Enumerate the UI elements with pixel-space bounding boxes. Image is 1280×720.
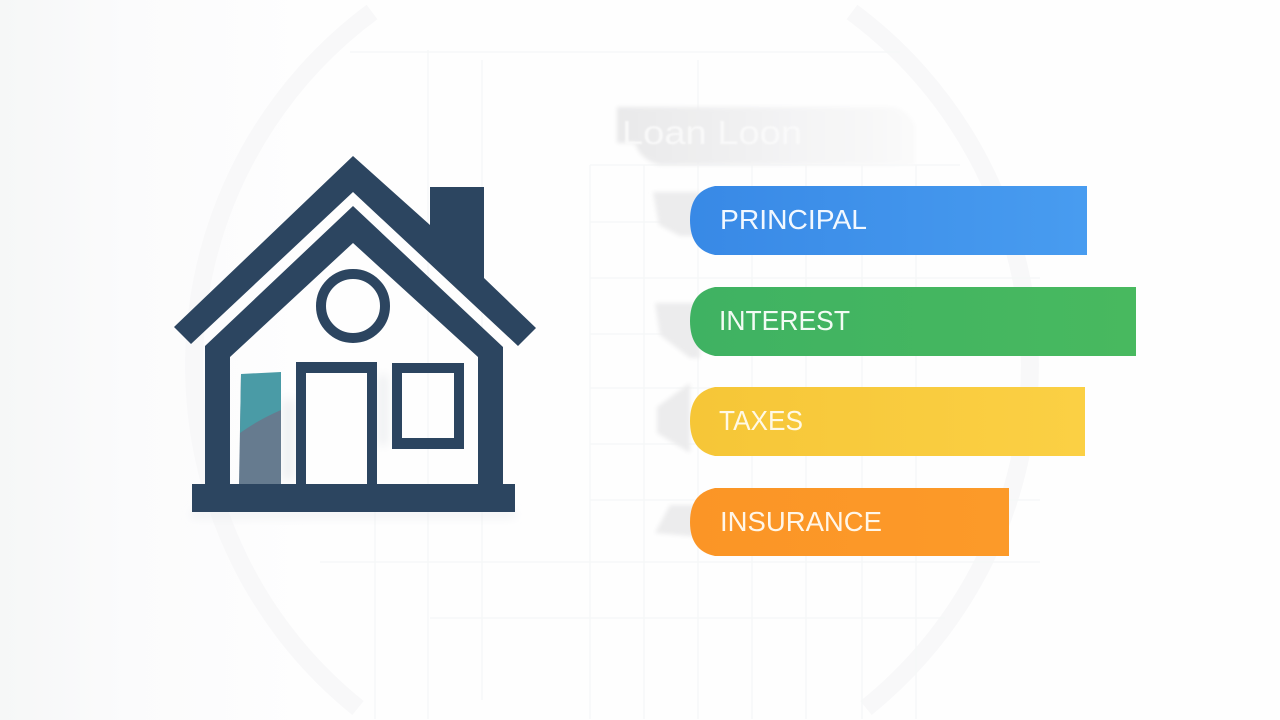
soft shadows [192, 375, 515, 516]
walls [205, 206, 503, 485]
bar: principal [690, 186, 1087, 255]
title text: Loan Loon [622, 114, 802, 151]
label: TAXES [719, 405, 803, 436]
bar: interest [690, 287, 1136, 356]
base [192, 484, 515, 512]
label: INSURANCE [720, 506, 882, 537]
square window [392, 363, 464, 449]
label: PRINCIPAL [720, 204, 867, 235]
round attic window [321, 274, 385, 338]
arrow stubs behind bars [653, 192, 700, 537]
house icon [174, 156, 536, 516]
label: INTEREST [719, 305, 850, 336]
teal side panel [239, 372, 281, 484]
background watermark circle and grid [194, 12, 1040, 719]
title background block [617, 107, 915, 165]
bar: insurance [690, 488, 1009, 556]
title placeholder [617, 107, 915, 165]
roof with chimney [174, 156, 536, 346]
bar: taxes [690, 387, 1085, 456]
door [296, 362, 377, 485]
